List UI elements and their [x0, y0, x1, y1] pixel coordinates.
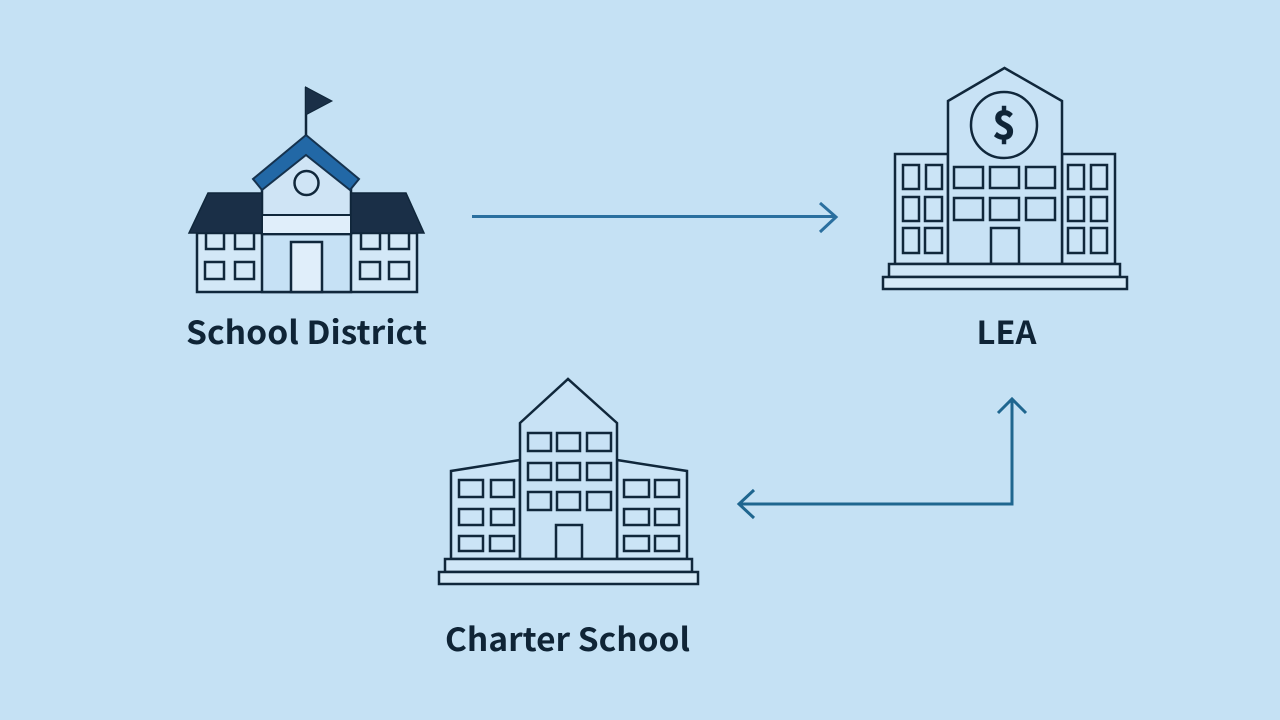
label: LEA: LEA: [976, 308, 1037, 354]
icon: dollar seal: [971, 92, 1037, 158]
icon: dollar seal: $: [992, 95, 1016, 151]
icon: LEA building with dollar seal: [883, 68, 1127, 289]
label: School District: School District: [186, 308, 427, 354]
arrow: school district to LEA: [472, 203, 836, 232]
label: Charter School: Charter School: [445, 615, 690, 661]
icon: charter school building: [439, 379, 698, 584]
icon: school district building: [189, 87, 424, 292]
arrow: LEA to charter school: [739, 399, 1026, 518]
